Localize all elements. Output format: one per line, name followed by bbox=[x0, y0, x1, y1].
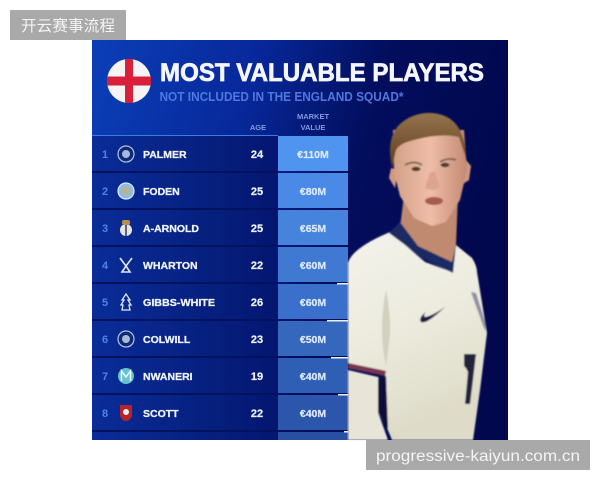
player collar bbox=[389, 222, 456, 273]
table row 3: A-Arnold: A-ARNOLD bbox=[143, 223, 199, 235]
shirt badge bbox=[471, 292, 486, 331]
table row 2: Foden: FODEN bbox=[143, 186, 180, 198]
table row 5: Gibbs-White: GIBBS-WHITE bbox=[143, 297, 215, 309]
table row 6: Colwill bbox=[92, 321, 348, 356]
white row ticks bbox=[327, 283, 348, 432]
watermark: bottom bbox=[366, 440, 590, 470]
table row 7: Nwaneri bbox=[92, 358, 348, 393]
table row 4: Wharton bbox=[92, 247, 348, 282]
table row 1: Palmer: 24 bbox=[251, 149, 264, 161]
player eyes and brows bbox=[405, 159, 456, 165]
player dark gap bbox=[378, 376, 388, 429]
table row 5: Gibbs-White bbox=[92, 284, 348, 319]
panel: infographic background bbox=[92, 40, 508, 440]
table row 4: Wharton: WHARTON bbox=[143, 260, 198, 272]
table row 1: Palmer: €110M bbox=[297, 149, 329, 161]
player arm bbox=[348, 370, 388, 440]
table row 8: Scott: SCOTT bbox=[143, 408, 179, 420]
table row 4: Wharton: 22 bbox=[251, 260, 263, 272]
table row 7: Nwaneri: €40M bbox=[300, 371, 326, 383]
shirt number 7 bbox=[464, 354, 476, 404]
table row 8: Scott bbox=[92, 395, 348, 430]
table row 7: Nwaneri: 7 bbox=[102, 371, 108, 383]
title: MOST VALUABLE PLAYERS bbox=[160, 59, 484, 87]
watermark: top: 开云赛事流程 bbox=[21, 16, 115, 35]
table row 6: Colwill: COLWILL bbox=[143, 334, 191, 346]
column header: market value: VALUE bbox=[301, 123, 325, 132]
table row 8: Scott: 8 bbox=[102, 408, 108, 420]
player face bbox=[393, 130, 467, 226]
icon: swoosh bbox=[420, 307, 445, 322]
table row 3: A-Arnold: 3 bbox=[102, 223, 108, 235]
table row 7: Nwaneri: NWANERI bbox=[143, 371, 193, 383]
player shirt bbox=[348, 232, 487, 440]
table row 7: Nwaneri: 19 bbox=[251, 371, 263, 383]
table row 6: Colwill: 6 bbox=[102, 334, 108, 346]
table row 5: Gibbs-White: €60M bbox=[300, 297, 326, 309]
player nose bbox=[425, 172, 440, 190]
table backing bbox=[92, 136, 278, 440]
watermark: top bbox=[10, 10, 126, 40]
watermark: bottom: progressive-kaiyun.com.cn bbox=[376, 448, 580, 465]
table row 6: Colwill: €50M bbox=[300, 334, 326, 346]
table row 2: Foden bbox=[92, 173, 348, 208]
table row 5: Gibbs-White: 26 bbox=[251, 297, 263, 309]
table row 3: A-Arnold: €65M bbox=[300, 223, 326, 235]
table row 8: Scott: €40M bbox=[300, 408, 326, 420]
column header: market value: MARKET bbox=[297, 112, 329, 121]
player mouth bbox=[425, 197, 443, 205]
table row 2: Foden: 2 bbox=[102, 186, 108, 198]
table row 5: Gibbs-White: 5 bbox=[102, 297, 108, 309]
player photo bbox=[348, 113, 487, 440]
table row 8: Scott: 22 bbox=[251, 408, 263, 420]
player ears bbox=[389, 160, 471, 188]
player sleeve shading bbox=[382, 290, 390, 366]
player neck bbox=[400, 195, 458, 272]
table row 6: Colwill: 23 bbox=[251, 334, 263, 346]
column header: age: AGE bbox=[250, 123, 266, 132]
table header rule bbox=[92, 135, 278, 136]
table row 2: Foden: €80M bbox=[300, 186, 326, 198]
player hair bbox=[390, 113, 466, 168]
table row 1: Palmer: 1 bbox=[102, 149, 108, 161]
table row 9: cropped bbox=[92, 432, 348, 440]
icon: England flag bbox=[107, 59, 151, 103]
table row 4: Wharton: €60M bbox=[300, 260, 326, 272]
table row 3: A-Arnold bbox=[92, 210, 348, 245]
table row 2: Foden: 25 bbox=[251, 186, 263, 198]
subtitle: NOT INCLUDED IN THE ENGLAND SQUAD* bbox=[160, 89, 404, 104]
table row 1: Palmer bbox=[92, 136, 348, 171]
table row 3: A-Arnold: 25 bbox=[251, 223, 263, 235]
player sleeve band bbox=[348, 363, 386, 376]
table row 4: Wharton: 4 bbox=[102, 260, 109, 272]
table row 1: Palmer: PALMER bbox=[143, 149, 187, 161]
column header: market value bbox=[297, 112, 329, 132]
